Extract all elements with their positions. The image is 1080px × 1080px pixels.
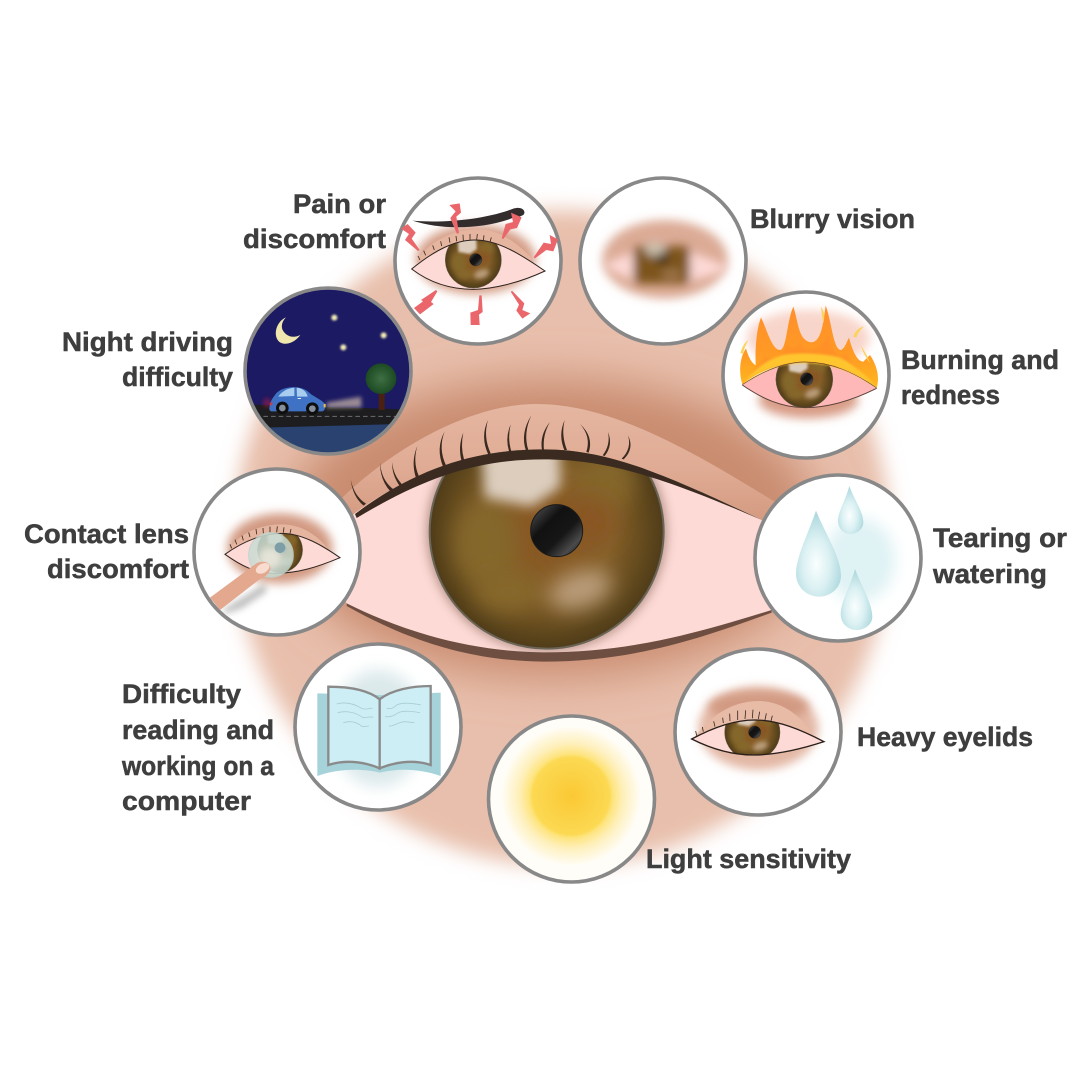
circle frame [194, 469, 360, 635]
skin background disc [234, 210, 890, 866]
panel: blurry vision [580, 178, 746, 344]
panel: difficulty reading [295, 644, 461, 810]
label: tearing or watering: watering [932, 559, 1047, 589]
label: light sensitivity: Light sensitivity [646, 844, 851, 874]
stars [331, 315, 387, 350]
tear drops [796, 486, 895, 630]
label: tearing or watering [932, 523, 1067, 589]
tail light glow [263, 398, 272, 407]
water [270, 424, 389, 452]
label: burning and redness: Burning and [901, 345, 1059, 375]
eyelashes [351, 415, 631, 506]
central large eye [330, 404, 780, 662]
tree [366, 363, 396, 410]
pain zigzags [401, 203, 558, 325]
eye with contact lens and finger [210, 513, 340, 613]
circle frame [580, 178, 746, 344]
circle frame [488, 716, 654, 882]
lens [249, 533, 293, 577]
eyebrow [412, 208, 524, 227]
label: night driving difficulty: Night driving [62, 327, 233, 357]
panel: heavy eyelids [675, 649, 841, 815]
finger [210, 562, 270, 610]
label: night driving difficulty: difficulty [122, 362, 233, 392]
label: contact lens discomfort: discomfort [47, 554, 189, 584]
headlight beam [327, 397, 362, 408]
label: pain or discomfort: discomfort [243, 224, 386, 254]
road [254, 404, 400, 428]
label: contact lens discomfort [24, 519, 189, 584]
panel: burning and redness [723, 292, 889, 458]
label: tearing or watering: Tearing or [933, 523, 1067, 553]
label: blurry vision: Blurry vision [750, 204, 915, 234]
sun glow [501, 726, 641, 866]
circle frame [723, 292, 889, 458]
label: night driving difficulty [62, 327, 233, 392]
blurred eye [602, 220, 730, 299]
label: burning and redness: redness [901, 380, 1000, 410]
label: burning and redness [901, 345, 1059, 410]
label: difficulty reading and working on a computer: computer [122, 786, 252, 816]
upper eyelid fold [330, 404, 780, 522]
night scene [246, 290, 410, 452]
label: difficulty reading and working on a computer: working on a [121, 751, 275, 781]
moon [276, 317, 300, 344]
circle frame [675, 649, 841, 815]
label: pain or discomfort [243, 189, 386, 254]
label: contact lens discomfort: Contact lens [24, 519, 189, 549]
label: difficulty reading and working on a computer [121, 679, 275, 816]
circle frame [395, 178, 561, 344]
sclera [330, 449, 780, 657]
panel: tearing or watering [755, 475, 921, 641]
hand shadow [222, 583, 267, 613]
circle frame [295, 644, 461, 810]
panel: light sensitivity [488, 716, 654, 882]
label: difficulty reading and working on a computer: Difficulty [122, 679, 241, 709]
iris with pupil [420, 450, 673, 652]
panel: pain or discomfort [395, 178, 561, 344]
lower lid line [347, 603, 772, 662]
upper lid line [355, 449, 762, 520]
droopy eye [692, 687, 824, 770]
car [269, 387, 326, 415]
burning eye [740, 306, 878, 418]
panel: night driving difficulty [243, 286, 413, 456]
label: heavy eyelids: Heavy eyelids [857, 722, 1033, 752]
flames [740, 306, 878, 388]
panel: contact lens discomfort [194, 469, 360, 635]
label: pain or discomfort: Pain or [293, 189, 386, 219]
open book [317, 670, 441, 787]
circle frame [755, 475, 921, 641]
label: difficulty reading and working on a computer: reading and [122, 715, 274, 745]
circle frame [245, 288, 411, 454]
eye with red pain marks [401, 203, 558, 325]
